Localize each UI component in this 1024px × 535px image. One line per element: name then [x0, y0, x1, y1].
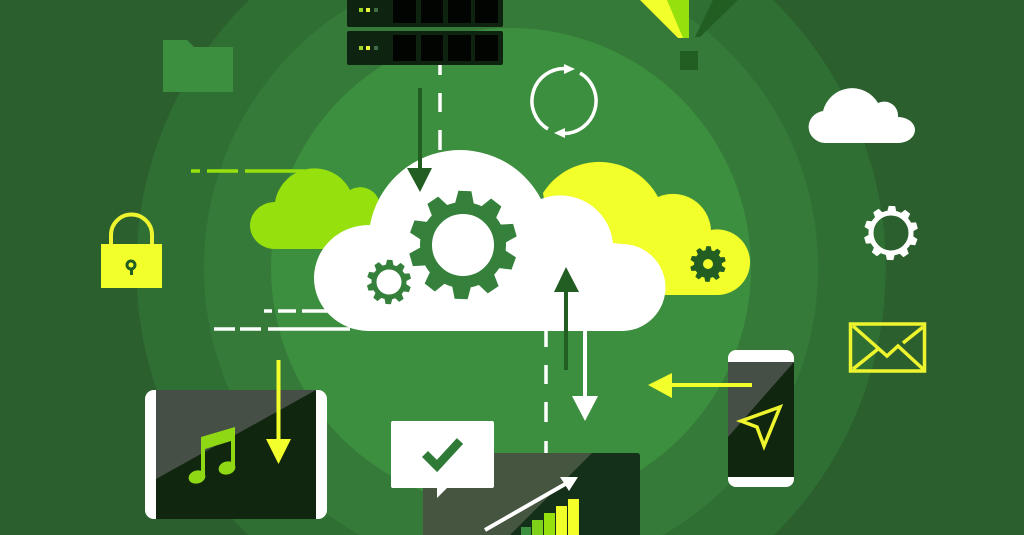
arrow: yellow left from phone — [648, 373, 752, 398]
icon: tablet with music note — [145, 390, 327, 519]
icon: hot air balloon — [640, 0, 738, 70]
dashed line: cloud to chart — [544, 331, 548, 453]
arrow: white trend — [485, 477, 578, 530]
arrow: dark up from cloud — [554, 267, 579, 370]
icon: folder — [163, 40, 233, 92]
cloud: lime — [250, 168, 395, 249]
icon: envelope — [850, 324, 924, 371]
icon: refresh arrows — [532, 64, 596, 138]
icon: large gear — [408, 191, 518, 299]
white dashed lines left of main cloud — [214, 311, 350, 329]
icon: gear on yellow cloud — [690, 246, 726, 282]
icon: small gear — [367, 260, 411, 304]
cloud: main white — [314, 150, 666, 331]
icon: smartphone with navigation arrow — [728, 350, 794, 487]
icon: white gear — [864, 206, 918, 260]
icon: small white cloud — [809, 88, 915, 143]
chart panel — [423, 453, 640, 535]
icon: server rack — [347, 0, 503, 65]
cloud: yellow — [543, 162, 750, 295]
icon: music notes — [187, 427, 237, 485]
speech bubble with check mark — [391, 421, 494, 498]
icon: padlock — [101, 214, 162, 288]
dashed line: server to cloud — [438, 65, 442, 150]
bar chart — [521, 499, 579, 535]
dashed line: green cloud link — [191, 169, 305, 173]
arrow: dark down into cloud — [407, 88, 432, 192]
arrow: yellow down into tablet — [266, 360, 291, 464]
arrow: white down from cloud — [572, 331, 598, 421]
